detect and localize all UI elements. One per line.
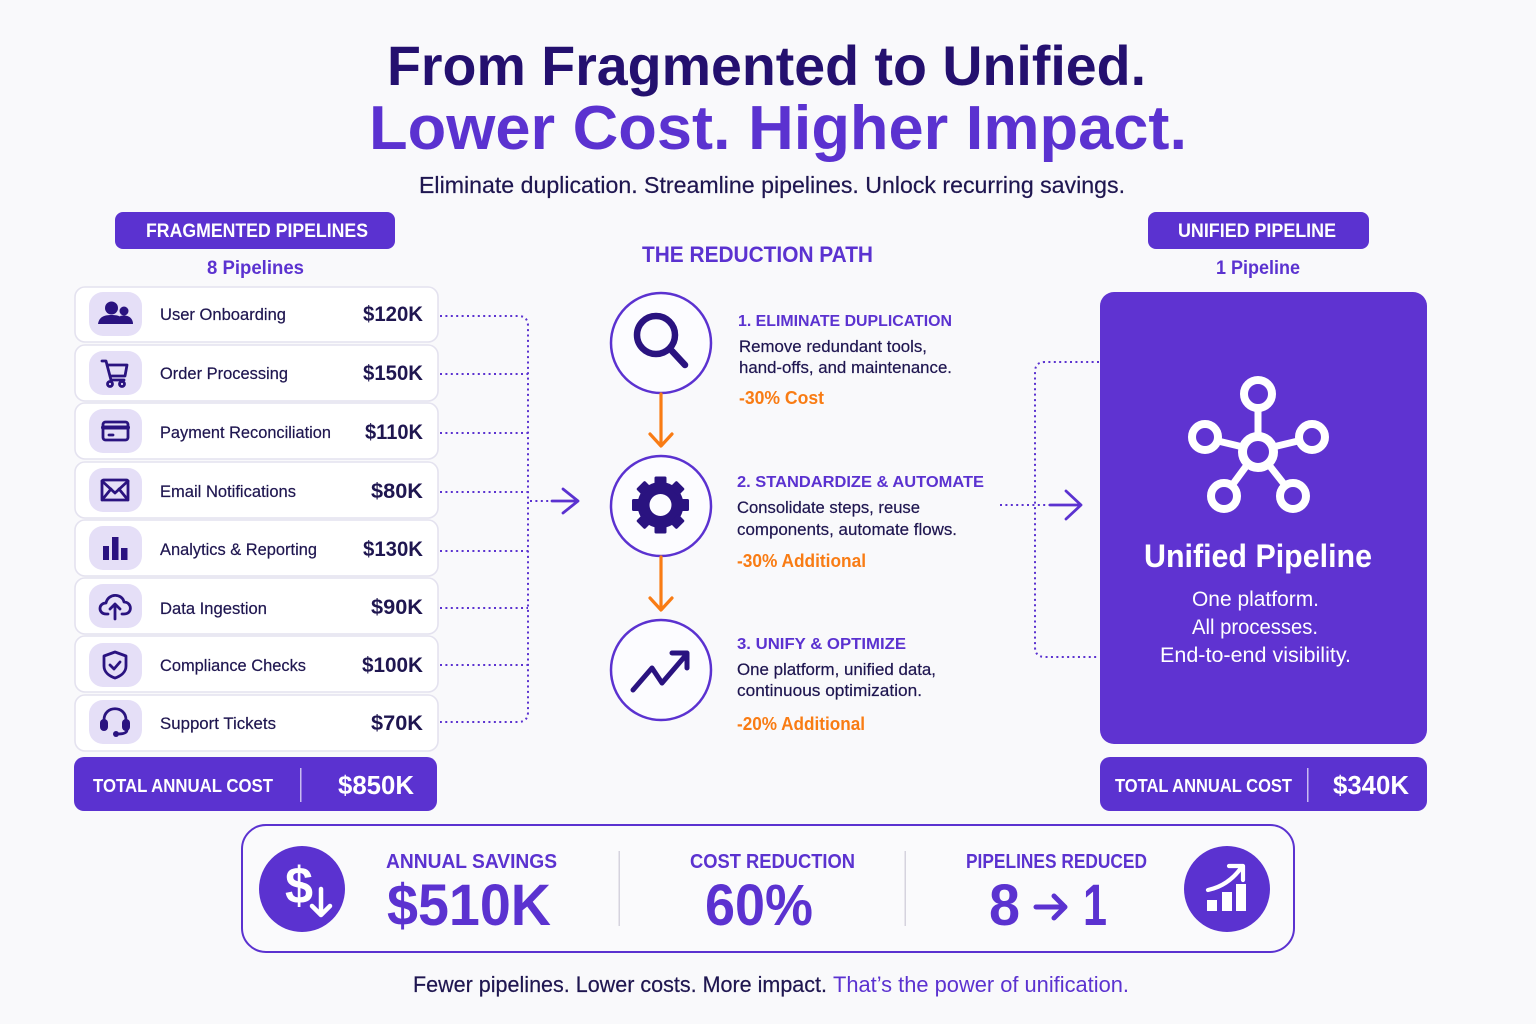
step 1 text: -30% Cost [739, 388, 824, 408]
panel description: All processes. [1192, 616, 1318, 639]
total cost: fragmented: $850K [338, 770, 414, 800]
step 2 text: Consolidate steps, reuse [737, 499, 920, 517]
row: analytics and reporting: $130K [363, 538, 423, 561]
icon: trend step [611, 620, 711, 720]
step 3 text: continuous optimization. [737, 682, 922, 700]
metric: pipelines reduced: 8 [989, 873, 1020, 938]
panel description [1160, 588, 1351, 667]
subheading: 8 pipelines: 8 Pipelines [207, 258, 304, 279]
row: support tickets: $70K [371, 712, 423, 735]
row: compliance checks [75, 636, 438, 692]
icon: dollar down: $ [285, 857, 313, 915]
step 2 text: -30% Additional [737, 551, 866, 571]
row: data ingestion [75, 578, 438, 634]
subtitle: Eliminate duplication. Streamline pipelines. Unlock recurring savings. [419, 172, 1125, 198]
footer tagline: That’s the power of unification. [833, 972, 1129, 997]
icon: gear step [611, 456, 711, 556]
connector: reduction path to unified pipeline [1000, 362, 1099, 657]
metric: cost reduction: 60% [705, 873, 813, 938]
row: data ingestion: $90K [371, 596, 423, 619]
metric: cost reduction [690, 851, 855, 938]
arrow: step 1 to step 2 [650, 394, 672, 446]
row: email notifications [75, 462, 438, 518]
panel heading: Unified Pipeline [1144, 538, 1372, 574]
step 1 text: hand-offs, and maintenance. [739, 359, 952, 377]
step 3 text: 3. UNIFY & OPTIMIZE [737, 636, 906, 653]
step 2 text: 2. STANDARDIZE & AUTOMATE [737, 474, 984, 491]
panel: unified pipeline [1100, 292, 1427, 744]
row: order processing [75, 345, 438, 401]
row: order processing: $150K [363, 362, 423, 385]
badge: unified pipeline [1148, 212, 1369, 249]
metric: annual savings: $510K [387, 873, 551, 938]
footer tagline: Fewer pipelines. Lower costs. More impact. [413, 972, 827, 997]
title: From Fragmented to Unified. [387, 34, 1146, 97]
row: data ingestion: Data Ingestion [160, 599, 267, 618]
step 3 text [737, 636, 936, 734]
footer tagline [413, 972, 1129, 997]
icon: network hub [1192, 380, 1325, 509]
total cost: fragmented [74, 757, 437, 811]
total cost: unified [1100, 757, 1427, 811]
panel description: End-to-end visibility. [1160, 644, 1351, 667]
row: user onboarding: User Onboarding [160, 305, 286, 324]
row: analytics and reporting: Analytics & Reporting [160, 540, 317, 559]
row: payment reconciliation [75, 403, 438, 459]
row: email notifications: $80K [371, 480, 423, 503]
step 1 text [738, 313, 952, 408]
step 3 text: One platform, unified data, [737, 661, 936, 679]
step 3 text: -20% Additional [737, 714, 865, 734]
row: user onboarding [75, 287, 438, 342]
total cost: fragmented: TOTAL ANNUAL COST [93, 776, 273, 796]
total cost: unified: $340K [1333, 770, 1409, 800]
row: analytics and reporting [75, 520, 438, 576]
row: compliance checks: $100K [362, 654, 423, 677]
row: compliance checks: Compliance Checks [160, 656, 306, 675]
panel description: One platform. [1192, 588, 1319, 611]
icon: growth chart [1184, 846, 1270, 932]
row: payment reconciliation: Payment Reconciliation [160, 423, 331, 442]
row: support tickets: Support Tickets [160, 714, 276, 733]
metric: pipelines reduced: PIPELINES REDUCED [966, 851, 1147, 873]
step 2 text: components, automate flows. [737, 521, 957, 539]
row: email notifications: Email Notifications [160, 482, 296, 501]
step 2 text [737, 474, 984, 571]
panel: fragmented pipeline list [75, 287, 438, 751]
badge: unified pipeline: UNIFIED PIPELINE [1178, 221, 1336, 242]
row: support tickets [75, 695, 438, 751]
title: Lower Cost. Higher Impact. [369, 94, 1187, 163]
connector: pipelines to reduction path [440, 316, 578, 722]
heading: the reduction path: THE REDUCTION PATH [642, 242, 873, 267]
title [369, 34, 1187, 163]
panel: savings summary [242, 825, 1294, 952]
row: user onboarding: $120K [363, 303, 423, 326]
metric: cost reduction: COST REDUCTION [690, 851, 855, 873]
metric: pipelines reduced [966, 851, 1147, 938]
row: payment reconciliation: $110K [365, 421, 423, 444]
metric: annual savings: ANNUAL SAVINGS [386, 851, 557, 873]
arrow: step 2 to step 3 [650, 557, 672, 610]
subheading: 1 pipeline: 1 Pipeline [1216, 258, 1300, 279]
icon: magnifier step [611, 293, 711, 393]
badge: fragmented pipelines: FRAGMENTED PIPELINES [146, 221, 368, 242]
step 1 text: 1. ELIMINATE DUPLICATION [738, 313, 952, 330]
total cost: unified: TOTAL ANNUAL COST [1115, 776, 1292, 796]
step 1 text: Remove redundant tools, [739, 338, 927, 356]
badge: fragmented pipelines [115, 212, 395, 249]
icon: dollar down [259, 846, 345, 932]
metric: pipelines reduced: 1 [1083, 873, 1107, 938]
row: order processing: Order Processing [160, 364, 288, 383]
